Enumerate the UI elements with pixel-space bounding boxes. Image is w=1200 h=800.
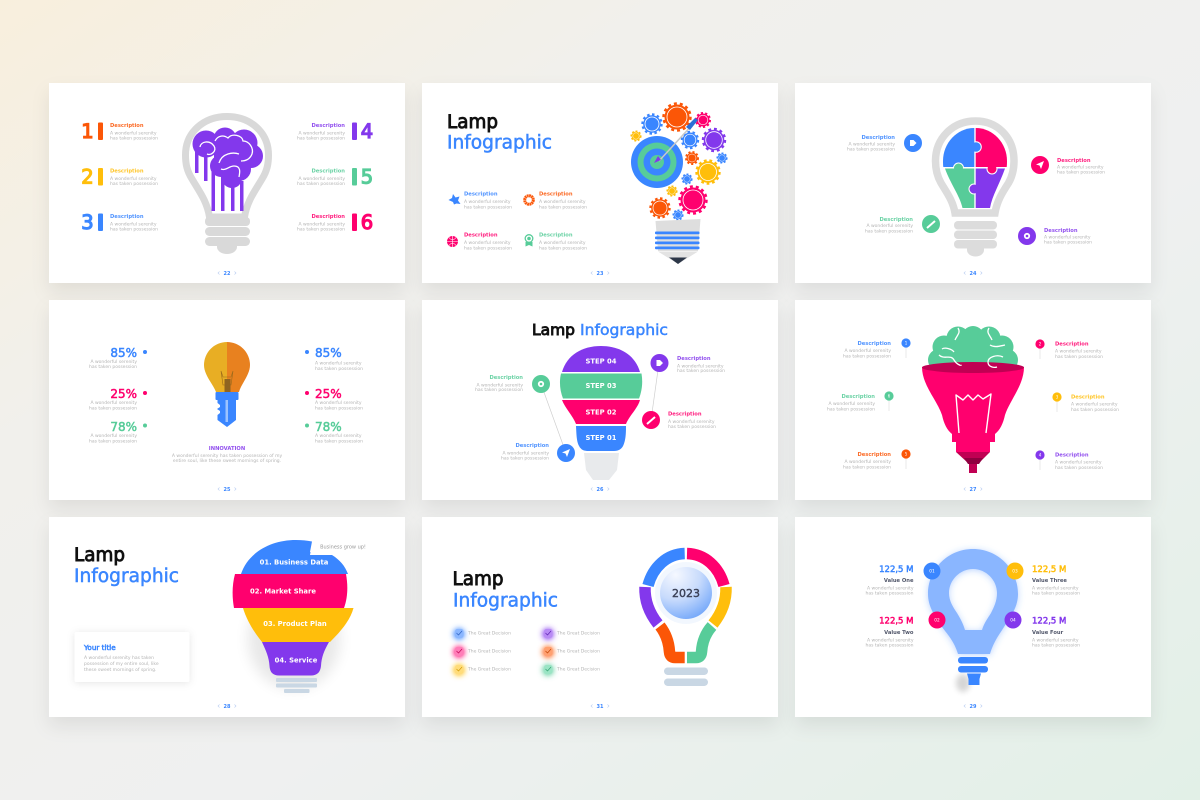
page number: 27 <box>970 487 977 493</box>
decision blue: The Great Decision <box>467 630 511 636</box>
item 1: has taken possession <box>110 136 158 142</box>
item 6 <box>297 211 373 234</box>
marker 1: A wonderful serenity <box>844 348 891 354</box>
stat right 25: has taken possession <box>315 406 363 412</box>
item: flower <box>525 192 587 210</box>
page number: 23 <box>597 271 604 277</box>
segment 01: 01. Business Data <box>260 558 329 566</box>
value two: A wonderful serenity <box>867 638 914 644</box>
callout pink <box>1031 156 1105 176</box>
item 6: 6 <box>361 211 373 234</box>
marker 4: has taken possession <box>1055 465 1103 471</box>
item 5: has taken possession <box>297 181 345 187</box>
stat right 25: 25% <box>315 387 342 401</box>
innovation text <box>172 446 282 464</box>
item 5 <box>297 166 373 188</box>
value four: 04 <box>1010 618 1016 624</box>
page number: 24 <box>970 271 977 277</box>
item: star: A wonderful serenity <box>464 199 511 205</box>
stat left 85: has taken possession <box>89 364 137 370</box>
item 1: A wonderful serenity <box>110 130 157 136</box>
callout pink: Description <box>668 412 702 418</box>
stat left 85: A wonderful serenity <box>90 359 137 365</box>
item: globe: Description <box>464 232 498 238</box>
item 3: Description <box>110 214 144 220</box>
tag: business grow up: Business grow up! <box>320 544 366 550</box>
page number: 22 <box>224 271 231 277</box>
marker 2: A wonderful serenity <box>1055 348 1102 354</box>
value three: 03 <box>1012 569 1018 575</box>
text card: A wonderful serenity has taken <box>84 655 154 661</box>
callout purple: has taken possession <box>677 368 725 374</box>
marker 2: has taken possession <box>1055 354 1103 360</box>
panel: slide 26 steps bulb <box>422 300 778 500</box>
value three: Value Three <box>1032 578 1067 584</box>
callout pink: A wonderful serenity <box>1057 164 1104 170</box>
marker 3 <box>1052 392 1119 413</box>
panel: slide 22 brain bulb <box>49 83 405 283</box>
marker 6: Description <box>841 394 875 400</box>
item: medal <box>525 232 587 252</box>
icon: purple brain <box>192 128 263 211</box>
innovation text: INNOVATION <box>209 446 245 452</box>
step 04: STEP 04 <box>586 358 617 366</box>
value one <box>865 562 940 596</box>
value two: Value Two <box>884 630 914 636</box>
item: medal: Description <box>539 232 573 238</box>
gears <box>631 104 727 220</box>
callout blue: A wonderful serenity <box>502 450 549 456</box>
bulb floor shadow <box>956 674 970 692</box>
page number: 28 <box>224 704 231 710</box>
panel: slide 24 puzzle bulb <box>795 83 1151 283</box>
page number <box>218 704 236 710</box>
callout green <box>865 215 940 234</box>
callout pink <box>642 411 716 430</box>
marker 5: A wonderful serenity <box>844 459 891 465</box>
page number: 31 <box>597 704 604 710</box>
item 5: A wonderful serenity <box>298 176 345 182</box>
step 04 <box>562 346 640 372</box>
stat left 25: 25% <box>110 387 137 401</box>
page number <box>218 487 236 493</box>
callout blue: A wonderful serenity <box>848 142 895 148</box>
decision orange <box>542 646 600 658</box>
marker 3: has taken possession <box>1071 407 1119 413</box>
item 1: 1 <box>81 120 94 143</box>
decision pink <box>454 646 511 658</box>
item 2: 2 <box>81 166 94 188</box>
callout pink: A wonderful serenity <box>668 419 715 425</box>
marker 4 <box>1035 450 1103 471</box>
decision pink: The Great Decision <box>467 648 511 654</box>
page number: 26 <box>597 487 604 493</box>
value one: 122,5 M <box>879 565 914 575</box>
marker 3: 3 <box>1056 395 1059 400</box>
marker 2: 2 <box>1039 342 1042 347</box>
bulb shadow <box>248 589 340 689</box>
title: Lamp <box>74 545 125 566</box>
bulb base <box>584 453 619 480</box>
callout pink: Description <box>1057 158 1091 164</box>
title: Infographic <box>453 590 558 612</box>
title: Lamp <box>532 321 575 339</box>
icon: bulb base <box>958 657 988 685</box>
callout blue: Description <box>515 443 549 449</box>
value three: has taken possession <box>1032 590 1080 596</box>
innovation text: entire soul, like these sweet mornings of spring. <box>173 458 281 464</box>
value one: Value One <box>884 578 914 584</box>
value two <box>865 612 946 648</box>
item 4: A wonderful serenity <box>298 130 345 136</box>
sphere 2023 <box>655 562 717 624</box>
item: medal: has taken possession <box>539 246 587 252</box>
title: Infographic <box>580 321 668 339</box>
marker 4: 4 <box>1039 453 1042 458</box>
item 3 <box>81 211 158 234</box>
stat left 85: 85% <box>110 346 137 360</box>
marker 1: 1 <box>905 341 908 346</box>
item 2: has taken possession <box>110 181 158 187</box>
callout blue: has taken possession <box>501 456 549 462</box>
panel: slide 25 key bulb <box>49 300 405 500</box>
step 03: STEP 03 <box>586 382 617 390</box>
icon: pencil base <box>655 219 700 264</box>
item 6: has taken possession <box>297 226 345 232</box>
icon: funnel bulb <box>922 362 1024 473</box>
item: globe: A wonderful serenity <box>464 240 511 246</box>
item 1: Description <box>110 123 144 129</box>
value four: has taken possession <box>1032 642 1080 648</box>
step 01 <box>576 426 626 451</box>
item 5: 5 <box>361 166 373 188</box>
callout purple <box>650 354 725 374</box>
callout green: A wonderful serenity <box>866 223 913 229</box>
item 2: A wonderful serenity <box>110 176 157 182</box>
step 02 <box>562 400 640 424</box>
item 1 <box>81 120 158 143</box>
marker 1: has taken possession <box>843 354 891 360</box>
bulb base bars <box>276 678 317 693</box>
bulb base pills <box>664 668 708 686</box>
marker 3: A wonderful serenity <box>1071 402 1118 408</box>
stat right 78: has taken possession <box>315 438 363 444</box>
tag: business grow up <box>310 539 374 555</box>
value two: 02 <box>934 618 940 624</box>
callout purple: has taken possession <box>1044 240 1092 246</box>
callout green: has taken possession <box>475 387 523 393</box>
segment 04 <box>262 642 329 676</box>
title: Lamp <box>447 112 498 133</box>
callout blue <box>847 134 922 152</box>
callout blue: Description <box>861 135 895 141</box>
panel: slide 31 segmented bulb <box>422 517 778 717</box>
item: star: Description <box>464 192 498 198</box>
item 2: Description <box>110 168 144 174</box>
callout green: Description <box>879 217 913 223</box>
segment 04: 04. Service <box>275 656 318 664</box>
decision green: The Great Decision <box>556 666 600 672</box>
page number <box>591 487 609 493</box>
marker 6: A wonderful serenity <box>828 401 875 407</box>
stat right 85: has taken possession <box>315 366 363 372</box>
segment 02 <box>233 574 347 608</box>
value one: has taken possession <box>865 590 914 596</box>
panel: slide 29 value bulb <box>795 517 1151 717</box>
item 5: Description <box>311 168 345 174</box>
decision yellow: The Great Decision <box>467 666 511 672</box>
item: flower: A wonderful serenity <box>539 199 586 205</box>
connector lines <box>541 363 659 453</box>
decision purple: The Great Decision <box>556 630 600 636</box>
stat right 25 <box>305 387 363 412</box>
page number <box>591 271 609 277</box>
item: star <box>448 192 512 210</box>
decision purple <box>542 628 600 640</box>
page number <box>964 487 982 493</box>
callout pink: has taken possession <box>668 424 716 430</box>
icon: grey bulb outline <box>186 116 268 254</box>
item 4: 4 <box>361 120 373 143</box>
panel: slide 23 gears bulb <box>422 83 778 283</box>
marker 4: Description <box>1055 452 1089 458</box>
marker 5 <box>843 449 911 470</box>
icon: light blue bulb <box>928 549 1018 654</box>
callout purple: Description <box>1044 228 1078 234</box>
step 01: STEP 01 <box>586 434 617 442</box>
item: flower: Description <box>539 192 573 198</box>
segment 01 <box>241 540 348 574</box>
brain curls <box>939 328 1005 367</box>
ring segments <box>645 554 726 658</box>
stat left 85 <box>89 346 147 370</box>
callout purple: A wonderful serenity <box>1044 234 1091 240</box>
text card: possession of my entire soul, like <box>84 661 159 667</box>
item 2 <box>81 166 158 188</box>
segment 03: 03. Product Plan <box>263 620 327 628</box>
icon: target with arrow <box>631 118 698 188</box>
marker 1: Description <box>857 341 891 347</box>
value three: A wonderful serenity <box>1032 586 1079 592</box>
marker 5: has taken possession <box>843 464 891 470</box>
item 6: A wonderful serenity <box>298 222 345 228</box>
stat right 85: 85% <box>315 346 342 360</box>
title <box>452 569 558 612</box>
callout blue: has taken possession <box>847 146 895 152</box>
title: Infographic <box>447 132 552 154</box>
title: Lamp <box>452 569 504 590</box>
stat right 85 <box>305 346 363 372</box>
title: Infographic <box>74 566 179 587</box>
value four: 122,5 M <box>1032 616 1066 626</box>
value four <box>1004 612 1080 648</box>
stat left 78 <box>89 420 147 444</box>
stat right 85: A wonderful serenity <box>315 360 362 366</box>
item 6: Description <box>311 214 345 220</box>
page number <box>964 271 982 277</box>
value one: 01 <box>929 569 935 575</box>
step 02: STEP 02 <box>586 408 617 416</box>
title <box>532 321 668 339</box>
item: star: has taken possession <box>464 204 512 210</box>
panel: slide 27 funnel bulb <box>795 300 1151 500</box>
stat left 25: has taken possession <box>89 406 137 412</box>
item: flower: has taken possession <box>539 204 587 210</box>
marker 4: A wonderful serenity <box>1055 460 1102 466</box>
callout purple: A wonderful serenity <box>677 364 724 370</box>
value three: 122,5 M <box>1032 565 1066 575</box>
icon: green brain <box>928 326 1018 371</box>
step 03 <box>560 374 642 398</box>
panel: slide 28 layered bulb <box>49 517 405 717</box>
marker 5: Description <box>857 452 891 458</box>
page number <box>591 704 609 710</box>
stat left 78: 78% <box>110 420 137 434</box>
innovation text: A wonderful serenity has taken possession of my <box>172 453 282 459</box>
decision blue <box>454 628 511 640</box>
value four: Value Four <box>1032 630 1064 636</box>
callout pink: has taken possession <box>1057 170 1105 176</box>
callout blue <box>501 443 575 462</box>
value two: 122,5 M <box>879 616 914 626</box>
marker 6 <box>827 391 894 412</box>
item 4: Description <box>311 123 345 129</box>
segment 02: 02. Market Share <box>250 588 316 596</box>
value one: A wonderful serenity <box>867 586 914 592</box>
callout purple <box>1018 227 1092 246</box>
marker 1 <box>843 338 911 360</box>
stat left 78: has taken possession <box>89 438 137 444</box>
stat left 25 <box>89 387 147 412</box>
segment 03 <box>243 608 354 642</box>
icon: grey bulb outline <box>936 121 1014 256</box>
callout purple: Description <box>677 356 711 362</box>
callout green <box>475 375 550 393</box>
marker 6: has taken possession <box>827 406 875 412</box>
item: medal: A wonderful serenity <box>539 240 586 246</box>
decision orange: The Great Decision <box>556 648 600 654</box>
callout green: has taken possession <box>865 228 913 234</box>
page number: 25 <box>224 487 231 493</box>
item 3: has taken possession <box>110 226 158 232</box>
marker 5: 5 <box>905 452 908 457</box>
stat right 78 <box>305 420 363 444</box>
text card: Your title <box>83 643 116 652</box>
item 4: has taken possession <box>297 136 345 142</box>
stat right 78: A wonderful serenity <box>315 433 362 439</box>
marker 2 <box>1035 339 1103 360</box>
marker 3: Description <box>1071 394 1105 400</box>
title <box>74 545 179 587</box>
decision yellow <box>454 664 511 676</box>
item 3: A wonderful serenity <box>110 222 157 228</box>
sphere 2023: 2023 <box>672 587 700 600</box>
icon: key bulb <box>204 342 250 427</box>
title <box>447 112 552 154</box>
stat left 25: A wonderful serenity <box>90 400 137 406</box>
item: globe <box>447 232 512 252</box>
icon: puzzle <box>943 128 1007 208</box>
page number <box>964 704 982 710</box>
stat left 78: A wonderful serenity <box>90 433 137 439</box>
callout green: Description <box>489 375 523 381</box>
marker 2: Description <box>1055 342 1089 348</box>
callout green: A wonderful serenity <box>476 382 523 388</box>
value two: has taken possession <box>865 642 914 648</box>
item 3: 3 <box>81 211 94 234</box>
page number: 29 <box>970 704 977 710</box>
text card: these sweet mornings of spring. <box>84 667 156 673</box>
page number <box>218 271 236 277</box>
marker 6: 6 <box>888 394 891 399</box>
stat right 25: A wonderful serenity <box>315 400 362 406</box>
decision green <box>542 664 600 676</box>
value three <box>1006 562 1080 596</box>
item 4 <box>297 120 373 143</box>
text card <box>74 632 190 682</box>
stat right 78: 78% <box>315 420 342 434</box>
value four: A wonderful serenity <box>1032 638 1079 644</box>
item: globe: has taken possession <box>464 246 512 252</box>
